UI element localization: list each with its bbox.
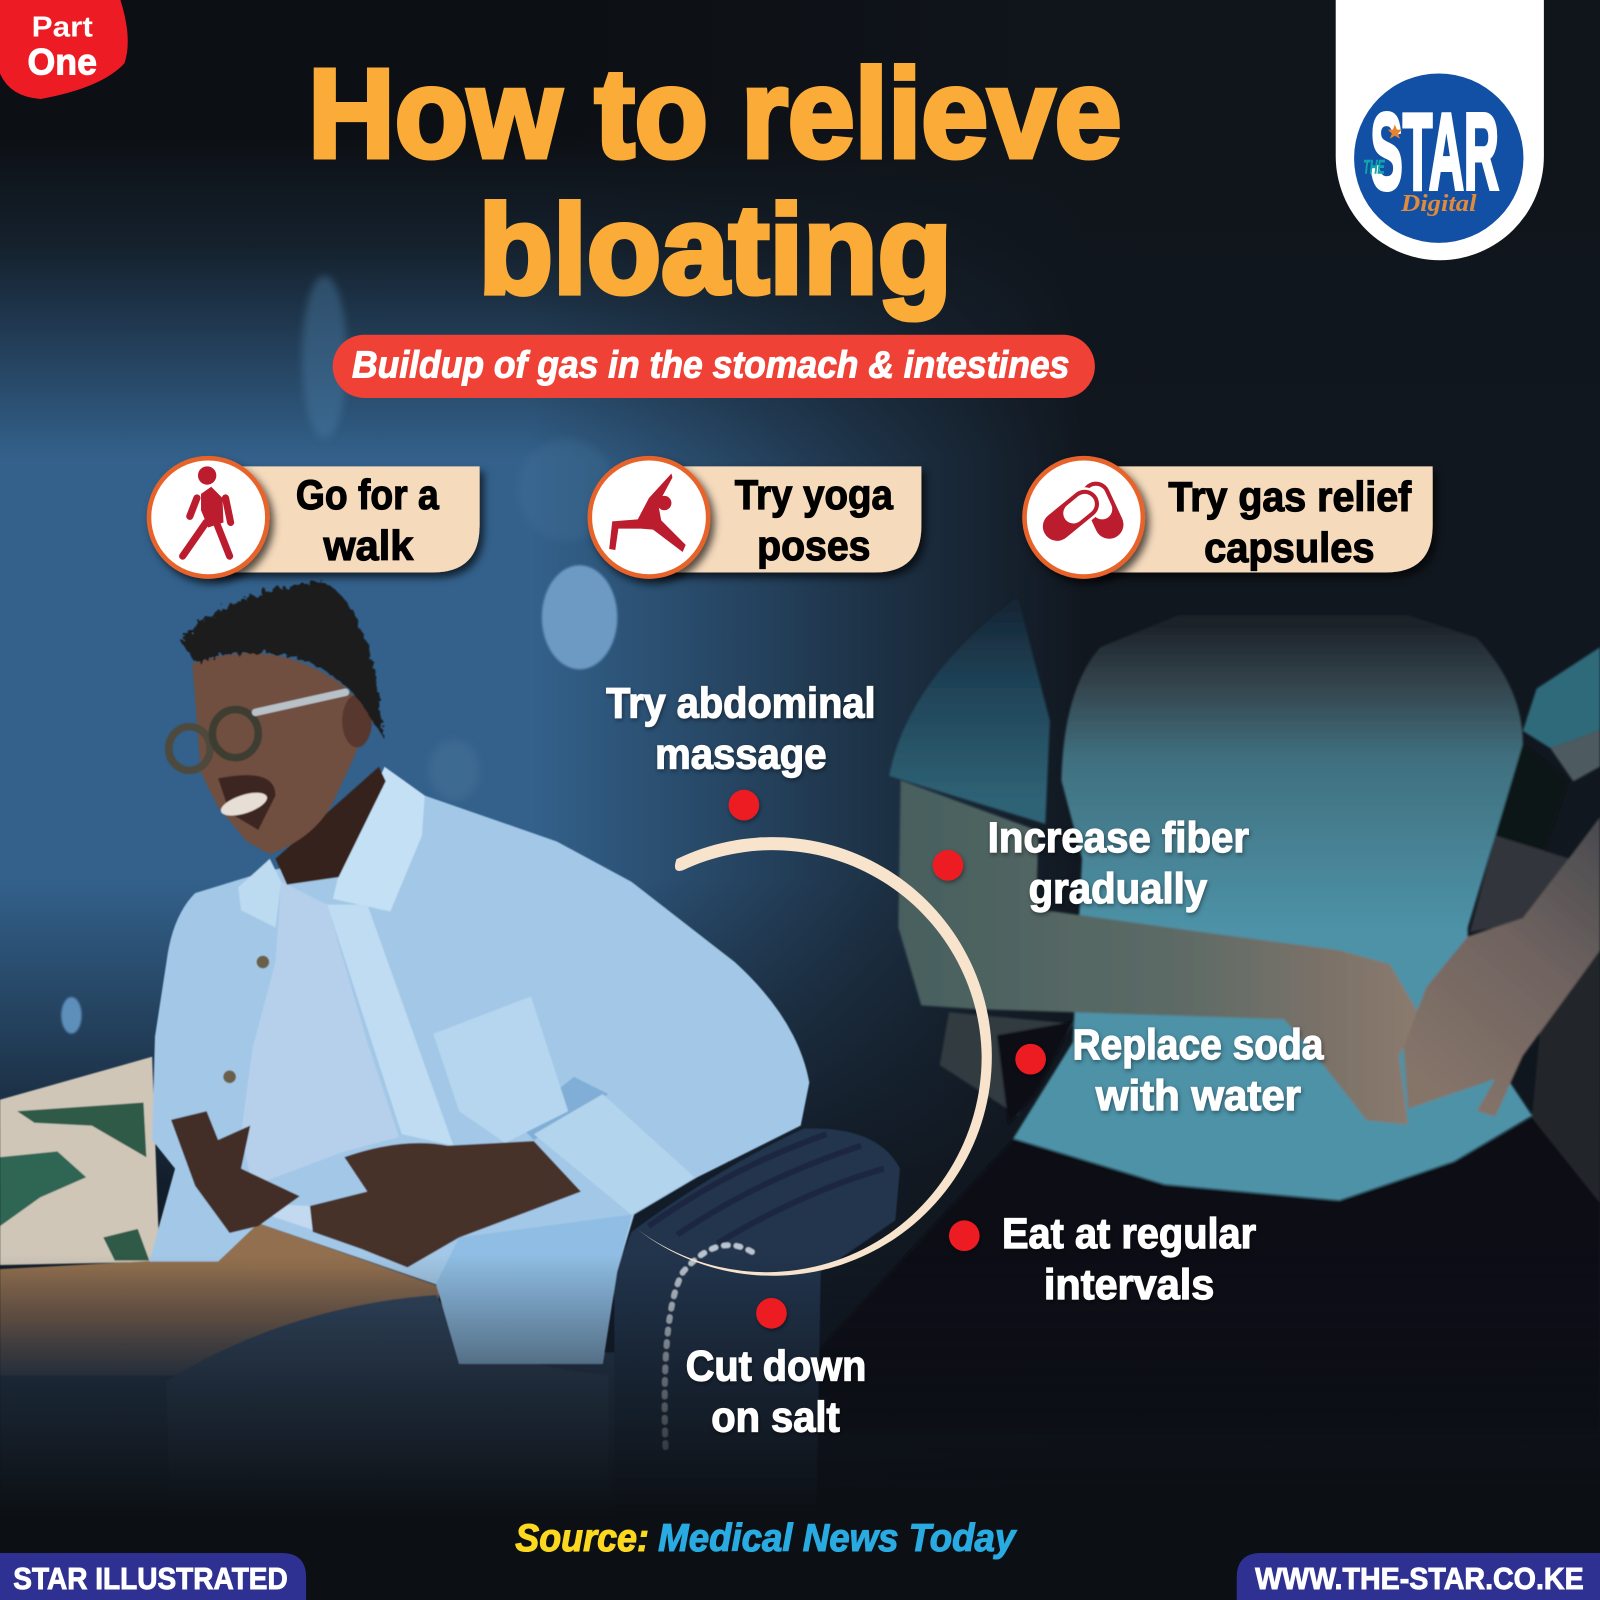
right arm and hand — [1403, 817, 1600, 1117]
source line — [515, 1517, 1018, 1560]
tip: increase fiber gradually: gradually — [1029, 865, 1207, 913]
logo: The Star Digital: THE — [1363, 156, 1385, 178]
hands — [171, 1111, 581, 1267]
title — [308, 42, 1121, 320]
hair — [181, 580, 383, 738]
logo: The Star Digital: Digital — [1400, 190, 1477, 217]
neck — [276, 767, 386, 885]
footer badge: website — [1237, 1553, 1600, 1600]
card: go for a walk: walk — [322, 522, 414, 569]
logo: The Star Digital — [1336, 0, 1544, 260]
card: try gas relief capsules — [1024, 458, 1433, 577]
photo: man holding stomach on sofa — [0, 580, 900, 1593]
footer badge: website: WWW.THE-STAR.CO.KE — [1255, 1562, 1584, 1596]
tip: try abdominal massage: massage — [655, 730, 827, 778]
card: try gas relief capsules: Try gas relief — [1168, 473, 1412, 520]
jeans base — [0, 1352, 631, 1593]
tip: try abdominal massage: Try abdominal — [606, 679, 876, 727]
tip: cut down on salt — [686, 1298, 866, 1442]
tip: replace soda with water: Replace soda — [1072, 1021, 1325, 1069]
source line: Source: — [515, 1517, 649, 1560]
card: go for a walk — [149, 458, 480, 577]
bottom fade over photos — [0, 1255, 1600, 1600]
tip: cut down on salt: Cut down — [686, 1343, 866, 1391]
trousers — [742, 1118, 1600, 1432]
tip: increase fiber gradually: Increase fiber — [988, 814, 1249, 862]
tip: eat at regular intervals: intervals — [1044, 1261, 1214, 1309]
tip: try abdominal massage — [606, 679, 876, 820]
part one badge — [0, 0, 128, 99]
subtitle pill: Buildup of gas in the stomach & intestines — [352, 344, 1069, 386]
tip: cut down on salt: on salt — [711, 1394, 840, 1442]
title: How to relieve — [308, 42, 1121, 184]
tip: increase fiber gradually — [933, 814, 1249, 913]
pillow — [0, 1057, 160, 1265]
title: bloating — [479, 178, 952, 320]
source line: Medical News Today — [658, 1517, 1018, 1560]
glasses — [169, 692, 346, 770]
card: go for a walk: Go for a — [296, 471, 439, 518]
icon: walking person — [149, 458, 267, 577]
left arm and hand — [898, 780, 1420, 1125]
footer badge: star illustrated — [0, 1553, 306, 1600]
card: try yoga poses — [590, 458, 921, 577]
card: try gas relief capsules: capsules — [1204, 524, 1374, 571]
denim shirt — [149, 767, 809, 1364]
subtitle pill — [333, 335, 1095, 398]
t-shirt — [241, 882, 399, 1186]
sleeves — [889, 597, 1600, 824]
icon: capsules — [1024, 458, 1143, 577]
collar and placket — [223, 767, 695, 1215]
part one badge: One — [28, 41, 97, 82]
icon: yoga pose — [590, 458, 708, 577]
tip: replace soda with water — [1015, 1021, 1325, 1120]
part one badge: Part — [32, 12, 93, 44]
card: try yoga poses: Try yoga — [735, 471, 894, 518]
footer badge: star illustrated: STAR ILLUSTRATED — [13, 1562, 288, 1596]
tip: replace soda with water: with water — [1095, 1072, 1301, 1120]
chair and dark backdrop — [940, 744, 1600, 1280]
tip: eat at regular intervals: Eat at regular — [1002, 1210, 1256, 1258]
arc — [638, 837, 992, 1276]
photo: woman holding stomach — [742, 597, 1600, 1432]
trousers — [0, 1223, 439, 1375]
head — [192, 653, 370, 854]
card: try yoga poses: poses — [757, 522, 870, 569]
sofa arm — [614, 1128, 900, 1593]
tip: eat at regular intervals — [949, 1210, 1256, 1309]
torso shirt — [1013, 615, 1532, 1201]
